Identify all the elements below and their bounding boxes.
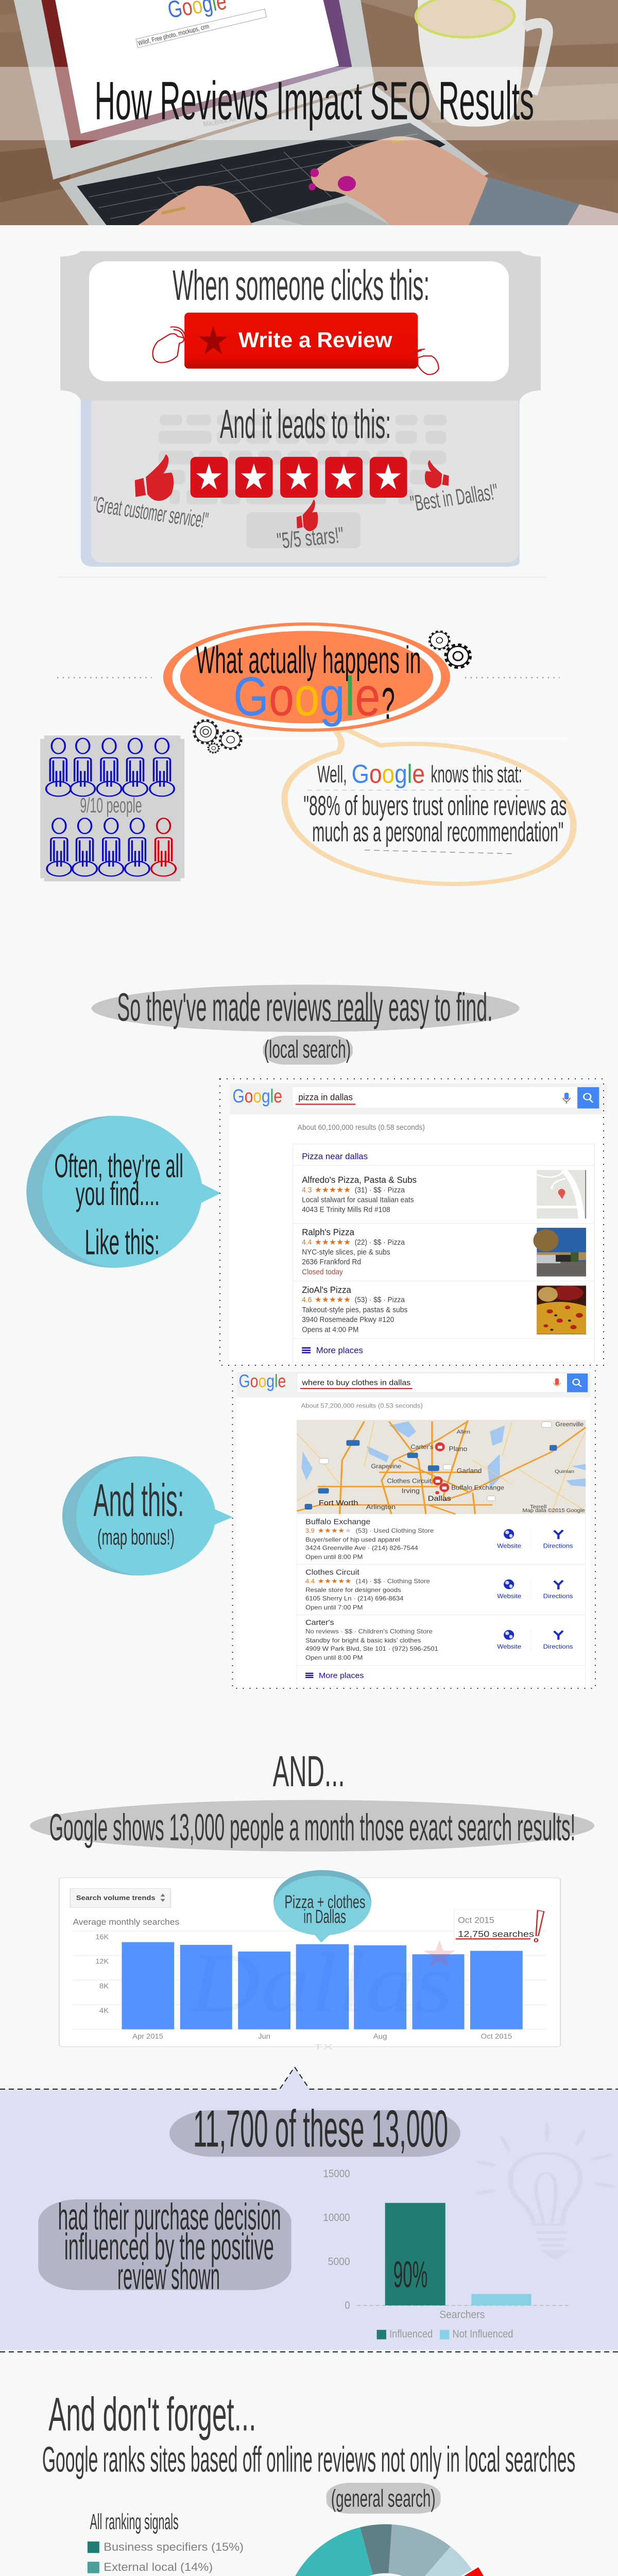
map: dallas area: Dallas <box>428 1495 451 1503</box>
map: dallas area: Allen <box>457 1429 470 1435</box>
map: dallas area: Plano <box>449 1445 468 1452</box>
result: clothes circuit: Resale store for designer goods <box>305 1586 401 1594</box>
link: more places <box>302 1346 363 1355</box>
panel: 9 of 10 people: 9/10 people <box>80 794 142 817</box>
bar chart: influenced searchers: 15000 <box>323 2168 350 2180</box>
result: alfredo's pizza: (31) · $$ · Pizza <box>355 1186 405 1194</box>
button: write a review: Write a Review <box>238 328 392 352</box>
bar chart: influenced searchers: Influenced <box>389 2328 433 2340</box>
map: dallas area: Grapevine <box>371 1463 401 1469</box>
speech bubble: pizza and clothes in dallas: in Dallas <box>303 1906 346 1927</box>
result: clothes circuit: Clothes Circuit <box>305 1568 359 1577</box>
legend: all ranking signals: All ranking signals <box>90 2509 179 2534</box>
panel: hero photo with title <box>0 0 618 225</box>
panel: 9 of 10 people <box>40 736 184 882</box>
result: alfredo's pizza: 4043 E Trinity Mills Rd #108 <box>302 1206 390 1214</box>
icon: thumbs up right <box>425 460 449 488</box>
result: buffalo exchange: Buyer/seller of hip used apparel <box>305 1536 400 1543</box>
panel: 11,700 influenced: review shown <box>117 2256 220 2297</box>
oval: what actually happens in google <box>163 622 450 732</box>
result: clothes circuit: (14) · $$ · Clothing Store <box>356 1578 430 1585</box>
speech bubble: often they're all you find: Like this: <box>85 1223 160 1262</box>
bar chart: influenced searchers: 5000 <box>328 2256 350 2267</box>
speech bubble: pizza and clothes in dallas <box>273 1870 371 1943</box>
actions: website and directions <box>497 1529 573 1650</box>
panel: monthly searches: Pizza + clothes <box>285 1892 365 1912</box>
actions: website and directions: Directions <box>543 1643 573 1650</box>
screenshot: pizza in dallas search: Pizza near dallas <box>302 1152 368 1161</box>
result: ralph's pizza: (22) · $$ · Pizza <box>355 1238 405 1246</box>
result: buffalo exchange: Open until 8:00 PM <box>305 1553 363 1561</box>
screenshot: where to buy clothes in dallas <box>237 1370 590 1687</box>
result: carter's: Carter's <box>305 1619 334 1627</box>
bar chart: influenced searchers: Searchers <box>439 2309 485 2321</box>
result: carter's: 4909 W Park Blvd, Ste 101 · (972) 596-2501 <box>305 1645 438 1652</box>
heading: 11,700 of these 13,000 <box>169 2099 460 2158</box>
bar chart: search volume trends: 8K <box>99 1982 109 1990</box>
result: zioal's pizza: 3940 Rosemeade Pkwy #120 <box>302 1315 394 1324</box>
bar chart: search volume trends: Search volume trends <box>76 1894 156 1902</box>
result: alfredo's pizza <box>302 1175 417 1214</box>
quote: five out of five stars: "5/5 stars!" <box>276 522 345 553</box>
result: ralph's pizza: ★★★★★ <box>315 1238 351 1247</box>
map: dallas area: Terrell <box>530 1504 546 1510</box>
panel: 11,700 influenced <box>38 2099 616 2340</box>
map: dallas area: Greenville <box>556 1421 583 1428</box>
result: clothes circuit: Open until 7:00 PM <box>305 1604 363 1611</box>
panel: click and lead: And it leads to this: <box>220 402 391 447</box>
panel: hero photo with title: MacBook Air <box>202 115 237 128</box>
icon: people row 2 <box>47 818 176 876</box>
legend: all ranking signals: External local (14%) <box>104 2561 213 2573</box>
pill: local search <box>263 1036 353 1064</box>
speech bubble: and this, map bonus: (map bonus!) <box>97 1525 175 1549</box>
result: buffalo exchange: 3424 Greenville Ave · (214) 826-7544 <box>305 1545 418 1551</box>
result: zioal's pizza: (53) · $$ · Pizza <box>355 1296 405 1304</box>
map: dallas area: Map data ©2015 Google <box>522 1508 585 1514</box>
bar chart: search volume trends: Apr 2015 <box>132 2032 163 2041</box>
screenshot: where to buy clothes in dallas: About 57,200,000 results (0.53 seconds) <box>301 1402 423 1409</box>
bar chart: search volume trends: Aug <box>373 2032 387 2041</box>
legend: all ranking signals <box>88 2509 244 2576</box>
panel: local search heading and first result <box>26 985 607 1364</box>
actions: website and directions: Directions <box>543 1592 573 1600</box>
result: ralph's pizza: Ralph's Pizza <box>302 1227 355 1237</box>
screenshot: pizza in dallas search <box>230 1083 607 1364</box>
bar chart: search volume trends: Oct 2015 <box>481 2032 512 2041</box>
screenshot: where to buy clothes in dallas: where to buy clothes in dallas <box>301 1378 410 1387</box>
result: alfredo's pizza: Local stalwart for casual Italian eats <box>302 1196 414 1204</box>
result: zioal's pizza: ★★★★★ <box>315 1295 351 1304</box>
result: carter's: Open until 8:00 PM <box>305 1654 363 1661</box>
result: carter's <box>305 1619 438 1661</box>
result: ralph's pizza: Closed today <box>302 1268 343 1276</box>
bar chart: influenced searchers: 10000 <box>323 2212 350 2224</box>
speech bubble: google stat: Well, <box>317 761 347 788</box>
map: dallas area: Quinlan <box>555 1469 574 1475</box>
panel: click and lead <box>60 251 541 567</box>
result: clothes circuit: ★★★★★ <box>318 1578 352 1585</box>
tooltip: october 2015: Oct 2015 <box>458 1916 494 1925</box>
speech bubble: google stat <box>285 730 574 884</box>
bar chart: influenced searchers: Not Influenced <box>453 2328 513 2340</box>
bar chart: search volume trends <box>59 1878 560 2052</box>
icon: thumbs up middle <box>297 500 318 531</box>
result: clothes circuit <box>305 1568 430 1611</box>
actions: website and directions: Website <box>497 1643 521 1650</box>
actions: website and directions: Directions <box>543 1543 573 1549</box>
panel: local search heading and first result: Often, they're all <box>55 1148 183 1184</box>
text: And this: <box>93 1475 184 1526</box>
result: buffalo exchange: (53) · Used Clothing Store <box>356 1527 434 1534</box>
legend: all ranking signals: Business specifiers (15%) <box>104 2540 244 2553</box>
quote: best in dallas: "Best in Dallas!" <box>408 479 500 516</box>
panel: lavender influence band <box>0 2067 618 2352</box>
speech bubble: often they're all you find <box>26 1116 221 1268</box>
map: dallas area: Garland <box>457 1467 482 1475</box>
screenshot: pizza in dallas search: pizza in dallas <box>298 1092 353 1103</box>
panel: click and lead: "Great customer service!" <box>91 492 210 533</box>
map: dallas area <box>297 1420 586 1514</box>
panel: local search heading and first result: (local search) <box>264 1036 351 1063</box>
panel: monthly searches <box>30 1747 594 2052</box>
text block: purchase decision influenced <box>38 2196 291 2297</box>
screenshot: where to buy clothes in dallas: Google <box>238 1371 286 1392</box>
bar chart: influenced searchers <box>323 2168 570 2340</box>
oval: what actually happens in google: Google <box>233 665 381 727</box>
map: dallas area: Clothes Circuit <box>387 1477 432 1484</box>
link: more places: More places <box>319 1671 364 1680</box>
result: alfredo's pizza: Alfredo's Pizza, Pasta & Subs <box>302 1175 417 1185</box>
bar chart: search volume trends: TX <box>313 2043 333 2052</box>
result: carter's: No reviews · $$ · Children's Clothing Store <box>305 1628 433 1635</box>
bar chart: search volume trends: 16K <box>95 1933 109 1941</box>
screenshot: pizza in dallas search: About 60,100,000 results (0.58 seconds) <box>298 1123 425 1131</box>
map: dallas area: Carter's <box>410 1444 434 1450</box>
tooltip: october 2015 <box>454 1910 544 1949</box>
thumbnail: street photo <box>533 1228 586 1277</box>
map: dallas area: Arlington <box>366 1503 396 1511</box>
result: alfredo's pizza: 4.3 <box>302 1186 312 1194</box>
panel: monthly searches: AND... <box>273 1747 345 1795</box>
result: zioal's pizza: Takeout-style pies, pastas & subs <box>302 1306 407 1314</box>
result: ralph's pizza <box>302 1227 405 1276</box>
result: buffalo exchange: 3.9 <box>305 1527 315 1534</box>
bar chart: influenced searchers: 0 <box>345 2299 350 2312</box>
oval: what actually happens in google: ? <box>382 679 395 728</box>
result: zioal's pizza: 4.6 <box>302 1296 312 1304</box>
dotted frames around search screenshots <box>220 1079 604 1688</box>
icon: pointing hand right <box>412 349 439 375</box>
bar chart: search volume trends: Dallas <box>188 1936 453 2030</box>
speech bubble: and this, map bonus <box>62 1456 233 1575</box>
thumbnail: map <box>537 1170 586 1218</box>
icon: gears top right <box>430 632 470 667</box>
result: clothes circuit: 6105 Sherry Ln · (214) 696-8634 <box>305 1595 404 1602</box>
thumbnail: pizza photo <box>537 1285 586 1334</box>
speech bubble: google stat: Google <box>352 759 425 788</box>
result: buffalo exchange: ★★★★★ <box>318 1527 352 1535</box>
result: ralph's pizza: 2636 Frankford Rd <box>302 1258 361 1266</box>
actions: website and directions: Website <box>497 1543 521 1549</box>
five star rating <box>191 457 407 498</box>
screenshot: pizza in dallas search: Google <box>233 1086 282 1107</box>
map: dallas area: Buffalo Exchange <box>451 1484 504 1491</box>
icon: thumbs up large <box>135 454 174 501</box>
icon: pointing hand left <box>153 327 186 363</box>
panel: hero photo with title: Wilof, Free photo, mockups, crm <box>137 23 210 47</box>
bar chart: search volume trends: 4K <box>99 2007 109 2015</box>
button: write a review <box>184 313 418 369</box>
donut chart: ranking signals <box>283 2524 544 2576</box>
speech bubble: often they're all you find: you find.... <box>76 1176 160 1212</box>
link: more places: More places <box>316 1346 363 1355</box>
result: carter's: Standby for bright & basic kids' clothes <box>305 1637 421 1644</box>
map: dallas area: Irving <box>402 1487 420 1495</box>
actions: website and directions: Website <box>497 1592 521 1600</box>
result: buffalo exchange <box>305 1518 434 1561</box>
bar chart: influenced searchers: 90% <box>393 2253 427 2295</box>
icon: lightbulb watermark <box>474 2123 616 2261</box>
panel: and don't forget <box>42 2388 575 2576</box>
bar chart: search volume trends: 12K <box>95 1957 109 1965</box>
tooltip: october 2015: 12,750 searches <box>458 1929 534 1939</box>
result: zioal's pizza: ZioAl's Pizza <box>302 1285 351 1295</box>
bar chart: search volume trends: Jun <box>258 2032 270 2041</box>
icon: gears left <box>194 720 241 753</box>
result: buffalo exchange: Buffalo Exchange <box>305 1518 370 1526</box>
pill: general search <box>327 2483 441 2514</box>
result: clothes circuit: 4.4 <box>305 1578 315 1585</box>
result: zioal's pizza <box>302 1285 407 1334</box>
panel: what happens in google <box>40 577 574 884</box>
bar chart: search volume trends: Average monthly searches <box>73 1917 179 1927</box>
icon: people row 1 <box>46 738 174 796</box>
result: ralph's pizza: 4.4 <box>302 1238 312 1246</box>
result: alfredo's pizza: ★★★★★ <box>315 1185 351 1194</box>
result: ralph's pizza: NYC-style slices, pie & subs <box>302 1248 390 1256</box>
result: zioal's pizza: Opens at 4:00 PM <box>302 1326 358 1334</box>
map: dallas area: Fort Worth <box>319 1499 358 1507</box>
